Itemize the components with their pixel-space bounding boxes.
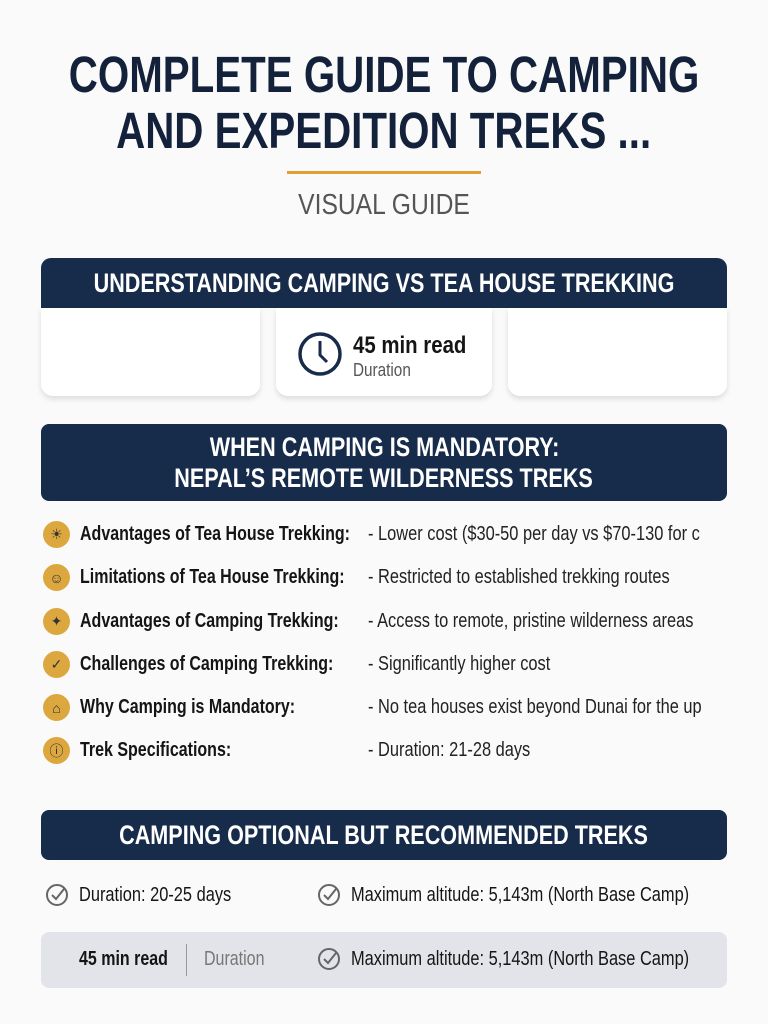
subtitle: VISUAL GUIDE <box>298 189 470 221</box>
row 5: Why Camping is Mandatory: <box>80 696 295 718</box>
row 5 <box>43 694 702 721</box>
card: duration <box>276 308 492 396</box>
title: COMPLETE GUIDE TO CAMPING <box>69 46 699 103</box>
row 4: - Significantly higher cost <box>368 653 550 675</box>
row 3: Advantages of Camping Trekking: <box>80 610 339 632</box>
item: duration: Duration: 20-25 days <box>79 884 231 906</box>
row 6: Trek Specifications: <box>80 739 231 761</box>
banner: mandatory <box>41 424 727 501</box>
row 3 <box>43 608 693 635</box>
icon: clock <box>298 332 342 376</box>
title: AND EXPEDITION TREKS ... <box>116 102 652 159</box>
accent line <box>287 171 481 174</box>
card: right <box>508 308 727 396</box>
banner: mandatory: WHEN CAMPING IS MANDATORY: <box>209 432 559 462</box>
list rows <box>43 521 702 764</box>
row 6 <box>43 737 530 764</box>
item: altitude: Maximum altitude: 5,143m (North Base Camp) <box>351 884 689 906</box>
row 6: ⓘ <box>50 742 64 758</box>
gray summary bar: Duration <box>204 948 264 970</box>
banner: optional <box>41 810 727 860</box>
row 1: - Lower cost ($30-50 per day vs $70-130 for c <box>368 523 700 545</box>
row 1: ☀ <box>50 526 63 542</box>
banner: understanding <box>41 258 727 308</box>
text: 45 min read: 45 min read <box>353 332 466 359</box>
row 2: Limitations of Tea House Trekking: <box>80 566 345 588</box>
title <box>69 46 699 159</box>
checklist row <box>46 884 689 906</box>
row 4: ✓ <box>51 656 62 672</box>
row 2: ☺ <box>49 570 64 586</box>
card: left <box>41 308 260 396</box>
item: altitude: Maximum altitude: 5,143m (North Base Camp) <box>351 948 689 970</box>
card: duration: Duration <box>353 360 411 380</box>
row 5: ⌂ <box>52 700 61 716</box>
row 3: - Access to remote, pristine wilderness areas <box>368 610 693 632</box>
banner: mandatory: NEPAL’S REMOTE WILDERNESS TREKS <box>175 463 593 493</box>
row 2 <box>43 564 670 591</box>
row 5: - No tea houses exist beyond Dunai for the up <box>368 696 702 718</box>
row 6: - Duration: 21-28 days <box>368 739 530 761</box>
banner: optional: CAMPING OPTIONAL BUT RECOMMENDED TREKS <box>120 820 648 850</box>
row 2: - Restricted to established trekking routes <box>368 566 670 588</box>
banner: understanding: UNDERSTANDING CAMPING VS TEA HOUSE TREKKING <box>94 268 674 298</box>
row 3: ✦ <box>51 613 62 629</box>
row 1: Advantages of Tea House Trekking: <box>80 523 350 545</box>
row 4 <box>43 651 550 678</box>
row 4: Challenges of Camping Trekking: <box>80 653 333 675</box>
gray summary bar: 45 min read <box>79 948 168 970</box>
gray summary bar <box>41 932 727 988</box>
row 1 <box>43 521 700 548</box>
